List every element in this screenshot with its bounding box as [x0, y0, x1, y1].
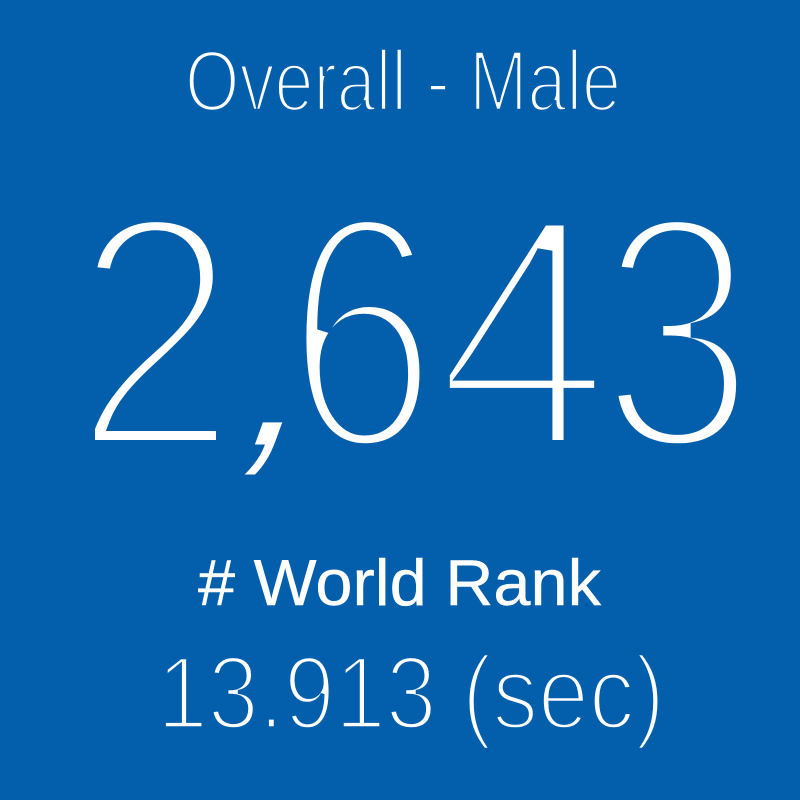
big number: world rank value: ,	[213, 234, 373, 496]
time value: 13.913 (sec)	[157, 636, 665, 752]
big number: world rank value: 2	[73, 145, 238, 519]
big number: world rank value	[73, 145, 755, 519]
big number: world rank value: 4	[435, 145, 611, 519]
big number: world rank value: 3	[600, 145, 755, 519]
label: world rank: # World Rank	[198, 546, 602, 619]
title: Overall - Male	[185, 34, 621, 130]
big number: world rank value: 6	[286, 145, 438, 519]
